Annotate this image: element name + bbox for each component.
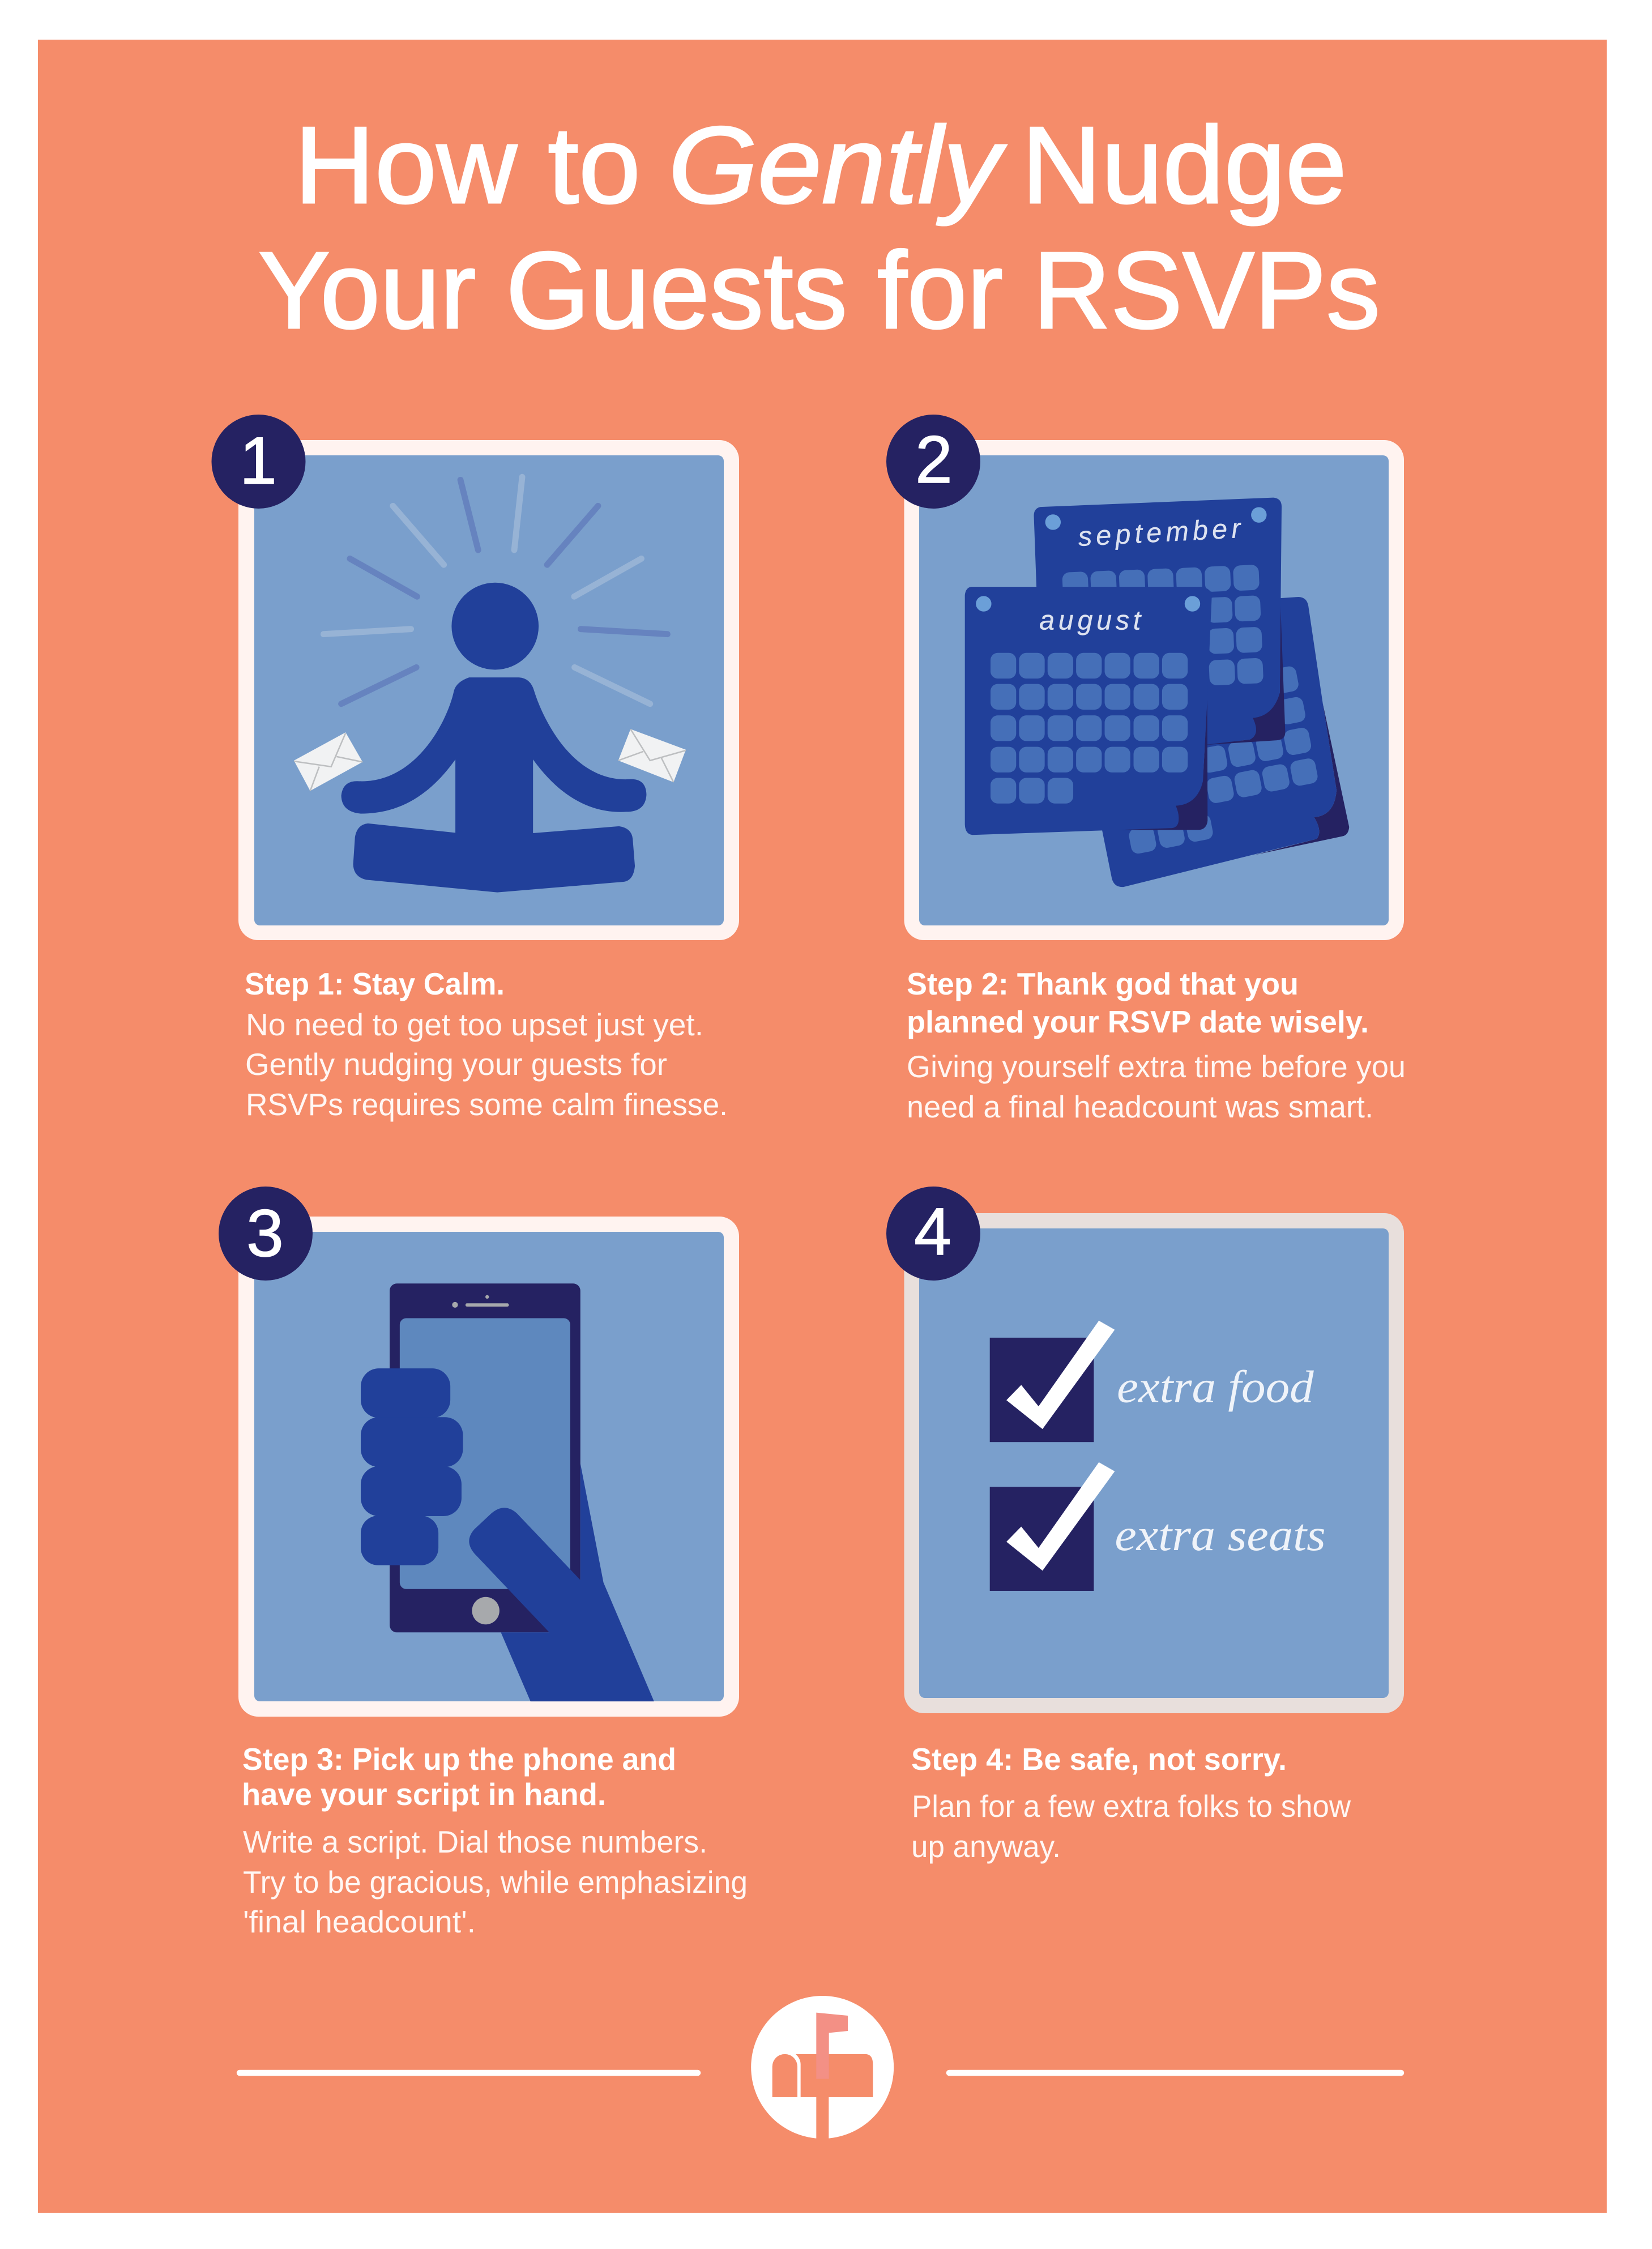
text block: step 3: 'final headcount'.: [243, 1904, 476, 1939]
number badge 2: [886, 415, 980, 509]
panel: step 1 stay calm: [212, 415, 739, 940]
icon: mailbox: [751, 1996, 894, 2139]
text block: step 3: [242, 1742, 748, 1939]
title: How to: [294, 104, 641, 226]
number badge 3: [219, 1187, 313, 1281]
august calendar page: august: [1039, 605, 1142, 635]
phone body: [390, 1283, 580, 1632]
back calendar page: [1058, 597, 1349, 887]
text block: step 4: [911, 1742, 1351, 1864]
title: Your Guests for RSVPs: [258, 229, 1380, 351]
illustration: calendars: [965, 498, 1349, 887]
text block: step 2: need a final headcount was smart.: [907, 1089, 1373, 1124]
illustration: hand holding phone: [361, 1283, 654, 1701]
text block: step 1: Gently nudging your guests for: [245, 1047, 667, 1082]
text block: step 3: Write a script. Dial those numbers.: [243, 1824, 707, 1859]
checkbox extra seats: [990, 1462, 1115, 1591]
text block: step 3: have your script in hand.: [242, 1777, 606, 1812]
number badge 2: 2: [915, 423, 953, 497]
number badge 1: 1: [240, 424, 277, 498]
label extra seats: extra seats: [1115, 1510, 1326, 1560]
panel: step 3 phone: [219, 1187, 739, 1717]
title: Nudge: [1022, 104, 1347, 226]
text block: step 4: Plan for a few extra folks to show: [912, 1789, 1351, 1824]
title: [258, 104, 1380, 351]
text block: step 4: up anyway.: [911, 1829, 1061, 1864]
text block: step 2: Step 2: Thank god that you: [907, 966, 1299, 1001]
fingers: [361, 1368, 463, 1565]
text block: step 3: Try to be gracious, while emphasizing: [243, 1864, 748, 1900]
panel: step 4 checklist: [886, 1187, 1404, 1713]
text block: step 2: Giving yourself extra time before you: [907, 1049, 1406, 1084]
footer: divider lines and mailbox: [240, 1996, 1401, 2139]
icon: right envelope: [618, 729, 686, 782]
text block: step 2: planned your RSVP date wisely.: [907, 1004, 1369, 1039]
september calendar page: september: [1077, 513, 1243, 552]
title: Gently: [668, 104, 1007, 226]
text block: step 1: RSVPs requires some calm finesse.: [246, 1087, 728, 1122]
figure head: [451, 583, 539, 669]
panel: step 2 calendars: [886, 415, 1404, 940]
hand and thumb: [469, 1463, 654, 1701]
text block: step 1: Step 1: Stay Calm.: [245, 966, 505, 1001]
text block: step 3: Step 3: Pick up the phone and: [242, 1742, 676, 1777]
number badge 3: 3: [246, 1196, 284, 1271]
number badge 1: [212, 415, 306, 509]
september calendar page: [1034, 498, 1285, 749]
august calendar page: [965, 587, 1212, 835]
number badge 4: 4: [914, 1194, 951, 1269]
text block: step 1: [245, 966, 728, 1122]
figure body: [342, 677, 646, 893]
number badge 4: [886, 1187, 980, 1281]
icon: left envelope: [294, 732, 362, 791]
calm rays: [323, 477, 667, 704]
checkbox extra food: [990, 1321, 1115, 1442]
illustration: checklist: [990, 1321, 1326, 1591]
illustration: meditating figure: [294, 477, 686, 893]
label extra food: extra food: [1117, 1362, 1314, 1412]
text block: step 4: Step 4: Be safe, not sorry.: [911, 1742, 1287, 1777]
text block: step 1: No need to get too upset just yet.: [246, 1007, 703, 1042]
text block: step 2: [907, 966, 1406, 1124]
